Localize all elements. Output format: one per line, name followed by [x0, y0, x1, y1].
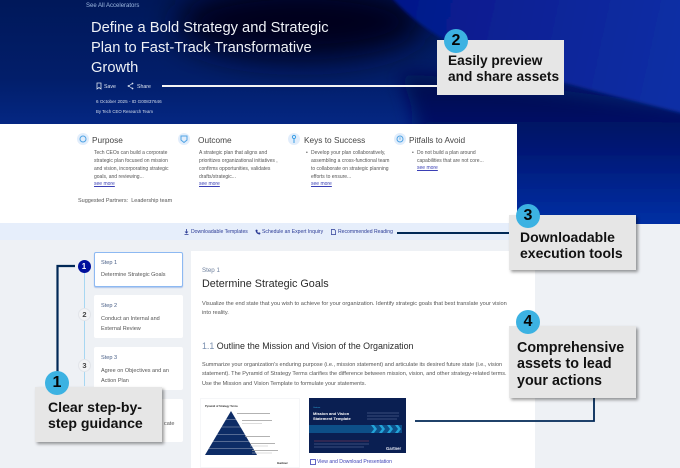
callout text: Easily preview: [448, 53, 542, 68]
number badge: 2: [452, 32, 460, 49]
breadcrumb link: See All Accelerators: [86, 2, 139, 8]
description: A strategic plan that aligns and prioritizes organizational initiatives , confirms opportunities, validates drafts/strategic...: [199, 150, 278, 180]
callout text: Downloadable: [520, 229, 615, 245]
date and document id: 6 October 2025 - ID G00837646: [96, 99, 162, 104]
column: pitfalls to avoid: •: [412, 150, 414, 156]
heading: Keys to Success: [304, 135, 365, 145]
callout text: Comprehensive: [517, 340, 624, 356]
callout 4: [509, 310, 640, 402]
downloadable templates link: Downloadable Templates: [191, 229, 248, 235]
column: outcome: [178, 133, 278, 187]
arrow: toolbar leader line: [397, 232, 512, 234]
toolbar: [0, 223, 517, 240]
step label: Step 1: [101, 260, 117, 266]
step marker 1: 1: [82, 262, 86, 270]
see more link: see more: [94, 181, 115, 187]
step name: Agree on Objectives and an Action Plan: [101, 368, 169, 384]
thumbnail: mission and vision template: Gartner: [313, 406, 321, 409]
icon: share: [128, 82, 134, 90]
author: By Tech CEO Research Team: [96, 109, 153, 114]
icon: key: [288, 133, 300, 145]
icon: document: [331, 229, 336, 235]
title: Define a Bold Strategy and Strategic Plan to Fast-Track Transformative Growth: [91, 20, 329, 76]
callout text: step guidance: [48, 415, 143, 431]
thumbnail: mission and vision template: [309, 398, 406, 453]
callout text: assets to lead: [517, 356, 612, 372]
icon: download: [184, 229, 188, 235]
column: keys to success: •: [306, 150, 308, 156]
callout text: [520, 229, 623, 261]
thumbnail: pyramid of strategy terms: [200, 398, 300, 468]
callout 1: [35, 371, 166, 446]
step description: Visualize the end state that you wish to achieve for your organization. Identify strategic goals that best translate your vision into reality.: [202, 301, 507, 316]
step eyebrow: Step 1: [202, 267, 220, 274]
step marker 2: [78, 308, 91, 321]
callout box: [509, 215, 636, 270]
thumbnail: mission and vision template: Gartner: [386, 446, 401, 451]
icon: shield check: [178, 133, 190, 145]
column: purpose: [77, 133, 168, 187]
section description: Summarize your organization's enduring purpose (i.e., mission statement) and articulate its desired future state (i.e., vision statement). The Pyramid of Strategy Terms clarifies the difference between mission, vision, and other strategy-related terms. Use the Mission and Vision Template to formulate your statements.: [202, 362, 507, 387]
share label: Share: [137, 84, 151, 90]
suggested partners: Suggested Partners: Leadership team: [78, 198, 172, 204]
callout text: execution tools: [520, 245, 623, 261]
arrow: assets leader line: [415, 398, 595, 422]
heading: Pitfalls to Avoid: [409, 135, 465, 145]
icon: bookmark: [96, 82, 102, 90]
view and download link: View and Download Presentation: [317, 459, 392, 465]
step label: Step 3: [101, 355, 117, 361]
description: Develop your plan collaboratively, assembling a cross-functional team to collaborate on strategic planning efforts to ensure...: [311, 150, 389, 180]
thumbnail: pyramid of strategy terms: Gartner: [277, 461, 289, 465]
step card 2: [94, 295, 183, 338]
number badge: [516, 204, 540, 228]
description: Do not build a plan around capabilities that are not core...: [417, 150, 484, 164]
number badge: [444, 29, 468, 53]
save and share actions: [96, 82, 151, 90]
callout text: Clear step-by-: [48, 399, 142, 415]
see more link: see more: [417, 165, 438, 171]
number badge: 3: [524, 207, 532, 224]
step heading: Determine Strategic Goals: [202, 278, 329, 290]
icon: phone: [256, 230, 260, 234]
thumbnail: mission and vision template: Statement Template: [313, 416, 351, 421]
column: pitfalls to avoid: [394, 133, 484, 171]
step card 1: [94, 252, 183, 287]
hero background: [0, 0, 680, 224]
recommended reading link: Recommended Reading: [338, 229, 393, 235]
callout text: [517, 340, 624, 389]
number badge: [516, 310, 540, 334]
schedule inquiry link: Schedule an Expert Inquiry: [262, 229, 323, 235]
number badge: 4: [524, 313, 532, 330]
icon: compass: [77, 133, 89, 145]
arrow: share leader line: [162, 85, 438, 87]
heading: Purpose: [92, 135, 123, 145]
number badge: [45, 371, 69, 395]
number badge: 1: [53, 374, 61, 391]
step label: Step 2: [101, 303, 117, 309]
section heading: 1.1 Outline the Mission and Vision of the Organization: [202, 341, 414, 351]
callout box: [509, 326, 636, 398]
panel: overview: [0, 124, 517, 223]
thumbnail: mission and vision template: Mission and Vision: [313, 411, 350, 416]
step marker 3: [78, 359, 91, 372]
step marker 2: 2: [82, 310, 87, 319]
callout text: and share assets: [448, 69, 559, 84]
callout text: [448, 53, 559, 84]
arrow: step leader line: [56, 264, 75, 372]
description: Tech CEOs can build a corporate strategic plan focused on mission and vision, incorporating strategic goals, and reviewing...: [94, 150, 168, 180]
icon: presentation: [310, 459, 316, 465]
callout text: [48, 399, 143, 431]
callout 3: [509, 204, 640, 274]
callout text: your actions: [517, 373, 602, 389]
step name: Determine Strategic Goals: [101, 272, 166, 278]
heading: Outcome: [198, 135, 232, 145]
step marker 1: [78, 260, 90, 272]
callout 2: [437, 29, 564, 95]
save label: Save: [104, 84, 116, 90]
callout box: [437, 40, 564, 95]
step name: cate: [164, 421, 174, 427]
icon: alert: [394, 133, 406, 145]
see more link: see more: [199, 181, 220, 187]
step card 3: [94, 347, 183, 390]
see more link: see more: [311, 181, 332, 187]
callout box: [35, 387, 162, 442]
step rail line: [84, 266, 85, 386]
step marker 3: 3: [82, 361, 87, 370]
column: keys to success: [288, 133, 390, 187]
thumbnail: pyramid of strategy terms: Pyramid of Strategy Terms: [205, 404, 238, 408]
step card 4: [94, 399, 183, 442]
step name: Conduct an Internal and External Review: [101, 316, 160, 332]
panel: step content: [191, 251, 535, 468]
